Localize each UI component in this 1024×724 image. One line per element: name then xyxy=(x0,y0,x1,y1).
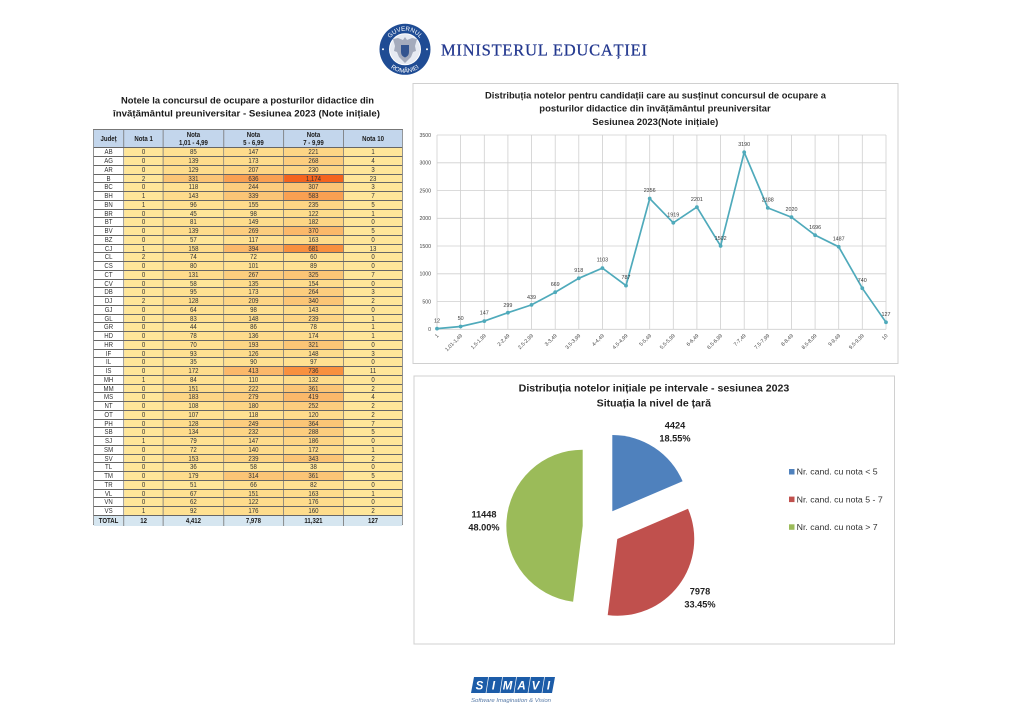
data labels: 12 xyxy=(434,318,440,324)
x axis labels: 10 xyxy=(881,333,889,342)
y axis labels: 3500 xyxy=(419,133,431,139)
x axis labels: 8,5-8,99 xyxy=(801,333,819,351)
chart title xyxy=(485,90,827,127)
x axis labels xyxy=(434,333,889,353)
x axis labels: 9-9,49 xyxy=(827,333,842,348)
data labels: 1919 xyxy=(667,213,679,219)
pie value labels xyxy=(468,420,716,609)
y axis labels: 1000 xyxy=(419,272,431,278)
x axis labels: 1,01-1,49 xyxy=(444,333,464,353)
x axis labels: 7-7,49 xyxy=(733,333,748,348)
x axis labels: 5,5-5,99 xyxy=(659,333,677,351)
x axis labels: 2,5-2,99 xyxy=(517,333,535,351)
data labels: 1502 xyxy=(715,236,727,242)
table header row xyxy=(94,130,402,148)
y axis labels: 500 xyxy=(422,299,431,305)
x axis labels: 4,5-4,99 xyxy=(612,333,629,351)
data labels: 1696 xyxy=(809,225,821,231)
table header row: 5 - 6,99 xyxy=(243,138,264,147)
logo: Guvernul Romaniei seal xyxy=(380,24,430,75)
data labels xyxy=(434,142,890,324)
panel: pie chart xyxy=(414,376,894,644)
table: grades by county xyxy=(93,129,403,525)
table total row: 127 xyxy=(368,516,378,525)
data labels: 2020 xyxy=(786,207,798,213)
data labels: 1103 xyxy=(597,258,608,264)
pie value labels: 18.55% xyxy=(659,433,691,443)
table total row: 11,321 xyxy=(304,516,323,525)
data labels: 1487 xyxy=(833,236,845,242)
y axis labels: 1500 xyxy=(419,244,431,250)
table total row: 12 xyxy=(140,516,147,525)
data labels: 2188 xyxy=(762,198,774,204)
x axis labels: 2-2,49 xyxy=(497,333,511,348)
data labels: 439 xyxy=(527,295,536,301)
logo: Simavi: Software Imagination & Vision xyxy=(471,698,551,704)
pie legend xyxy=(789,468,883,532)
data labels: 669 xyxy=(551,282,560,288)
logo: Guvernul Romaniei seal: ROMÂNIEI xyxy=(391,64,419,73)
y axis labels: 3000 xyxy=(419,161,431,167)
table header row: Nota 1 xyxy=(134,134,153,143)
pie title: Distribuția notelor inițiale pe intervale - sesiunea 2023 xyxy=(519,384,790,394)
data labels: 787 xyxy=(622,275,630,281)
table header row: 1,01 - 4,99 xyxy=(179,138,208,147)
pie value labels: 48.00% xyxy=(468,522,500,532)
table total row: TOTAL xyxy=(99,516,118,525)
pie slice: nota 5-7 xyxy=(608,509,694,616)
table total row: 4,412 xyxy=(186,516,201,525)
y axis labels: 2500 xyxy=(419,188,431,194)
table header row: Județ xyxy=(100,134,117,143)
data labels: 299 xyxy=(503,303,512,309)
pie value labels: 33.45% xyxy=(684,599,716,609)
x axis labels: 6,5-6,99 xyxy=(706,333,724,351)
pie value labels: 11448 xyxy=(471,509,497,519)
pie title: Situația la nivel de țară xyxy=(597,398,712,410)
data labels: 127 xyxy=(882,312,890,318)
x axis labels: 3,5-3,99 xyxy=(565,333,582,351)
x axis labels: 4-4,49 xyxy=(591,333,606,348)
x axis labels: 8-8,49 xyxy=(780,333,795,348)
chart title: posturilor didactice din învățământul preuniversitar xyxy=(539,104,771,114)
data labels: 918 xyxy=(574,268,583,274)
pie value labels: 7978 xyxy=(690,586,710,596)
table header row: 7 - 9,99 xyxy=(303,138,324,147)
x axis labels: 7,5-7,99 xyxy=(754,333,771,351)
data labels: 2201 xyxy=(691,197,703,203)
chart title: Sesiunea 2023(Note inițiale) xyxy=(592,117,718,127)
x axis labels: 6-6,49 xyxy=(686,333,700,348)
table header row: Nota 10 xyxy=(362,134,384,143)
logo: Simavi xyxy=(471,677,555,704)
x axis labels: 1,5-1,99 xyxy=(470,333,488,351)
table title: Notele la concursul de ocupare a posturilor didactice din xyxy=(121,95,374,106)
pie slice: nota peste 7 xyxy=(506,450,583,602)
x axis labels: 9,5-9,99 xyxy=(848,333,866,351)
panel: line chart xyxy=(413,84,898,364)
y axis labels: 0 xyxy=(428,327,431,333)
table title xyxy=(112,95,380,120)
data markers xyxy=(435,150,888,330)
data labels: 2356 xyxy=(644,188,656,194)
x axis labels: 5-5,49 xyxy=(638,333,653,348)
heading: Ministerul Educatiei: MINISTERUL EDUCAȚIEI xyxy=(441,40,647,60)
data labels: 740 xyxy=(858,278,867,284)
y axis labels xyxy=(419,133,431,333)
pie legend: Nr. cand. cu nota 5 - 7 xyxy=(797,495,883,504)
logo: Guvernul Romaniei seal: GUVERNUL xyxy=(388,26,422,38)
logo: Simavi: SIMAVI xyxy=(476,680,551,692)
pie value labels: 4424 xyxy=(665,420,686,430)
data labels: 50 xyxy=(458,316,464,322)
data labels: 3190 xyxy=(738,142,750,148)
table total row: 7,978 xyxy=(246,516,261,525)
table title: învățământul preuniversitar - Sesiunea 2023 (Note inițiale) xyxy=(112,108,380,120)
pie legend: Nr. cand. cu nota > 7 xyxy=(797,523,878,532)
pie legend: Nr. cand. cu nota < 5 xyxy=(797,468,878,477)
y axis labels: 2000 xyxy=(419,216,431,222)
data line xyxy=(437,152,886,329)
table total row xyxy=(94,516,402,526)
data labels: 147 xyxy=(480,311,489,317)
chart title: Distribuția notelor pentru candidații care au susținut concursul de ocupare a xyxy=(485,90,827,100)
x axis labels: 1 xyxy=(434,333,440,339)
pie slice: nota sub 5 xyxy=(612,435,683,511)
x axis labels: 3-3,49 xyxy=(544,333,559,348)
pie title xyxy=(519,384,790,410)
